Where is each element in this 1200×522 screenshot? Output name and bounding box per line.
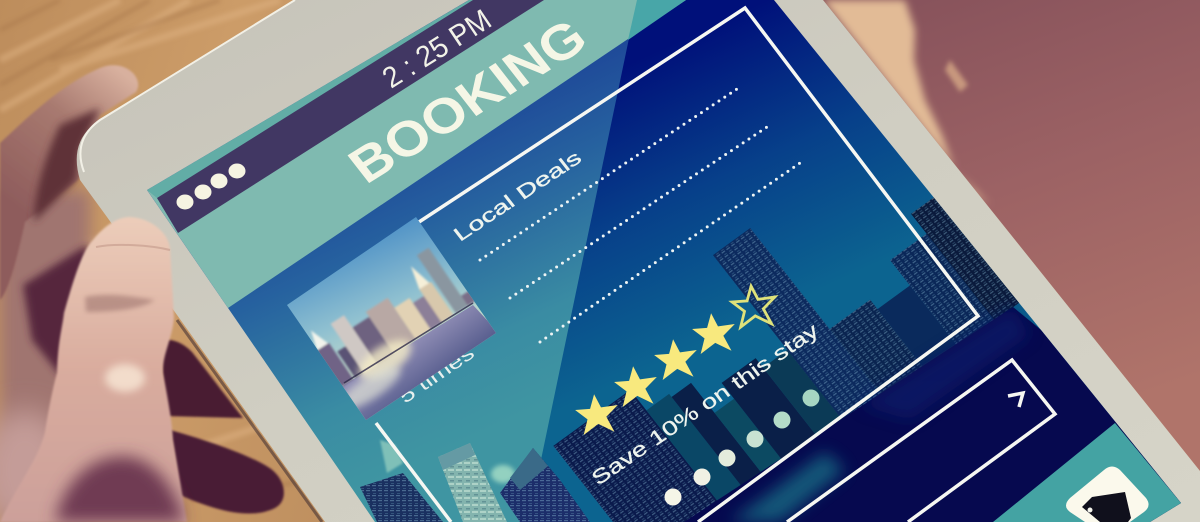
- thumb: freckled highlight: [105, 364, 145, 392]
- water: blue sheen: [860, 307, 1030, 420]
- card: dotted text lines: [480, 87, 800, 342]
- background: red-brown surface: [800, 0, 1200, 480]
- water: teal reflection: [730, 452, 845, 522]
- card heading: Local Deals: Local Deals: [450, 147, 586, 246]
- hand: back fingers: [0, 190, 284, 522]
- header: BOOKING title: BOOKING: [338, 9, 598, 194]
- action box outline: [787, 360, 1055, 522]
- header: darker teal behind beam: [628, 0, 686, 40]
- status bar: time: 2 : 25 PM: [377, 4, 498, 95]
- main card outline: [419, 8, 978, 522]
- hand: thumb: [0, 217, 187, 522]
- screen: dark right panel: [400, 0, 1200, 522]
- skyline: central and right towers: [554, 197, 1019, 522]
- offer text: Save 10% on this stay: [587, 319, 823, 490]
- screen: light beam panel: [147, 0, 629, 522]
- hand: index finger behind tablet edge: [0, 65, 138, 300]
- pagination dots: [664, 390, 820, 506]
- thumb: nail crease: [96, 245, 170, 250]
- water: [684, 307, 1200, 522]
- status bar: signal dots: [176, 164, 246, 210]
- thumb: knuckle wrinkles: [85, 295, 155, 312]
- action box chevron: [1008, 393, 1023, 407]
- header: upper teal edge: [147, 0, 480, 198]
- rating stars: [573, 283, 778, 437]
- background: wooden table: [0, 0, 420, 522]
- bottom bar: [993, 423, 1200, 522]
- skyline: left towers: [360, 440, 590, 522]
- tag icon: [1066, 466, 1149, 522]
- header: status bar: [157, 0, 544, 233]
- card thumbnail: city at dusk: [287, 217, 496, 420]
- partly hidden caption: 5 times: [394, 342, 478, 407]
- thumb: base shadow: [55, 457, 185, 522]
- header: teal strip: [147, 0, 686, 308]
